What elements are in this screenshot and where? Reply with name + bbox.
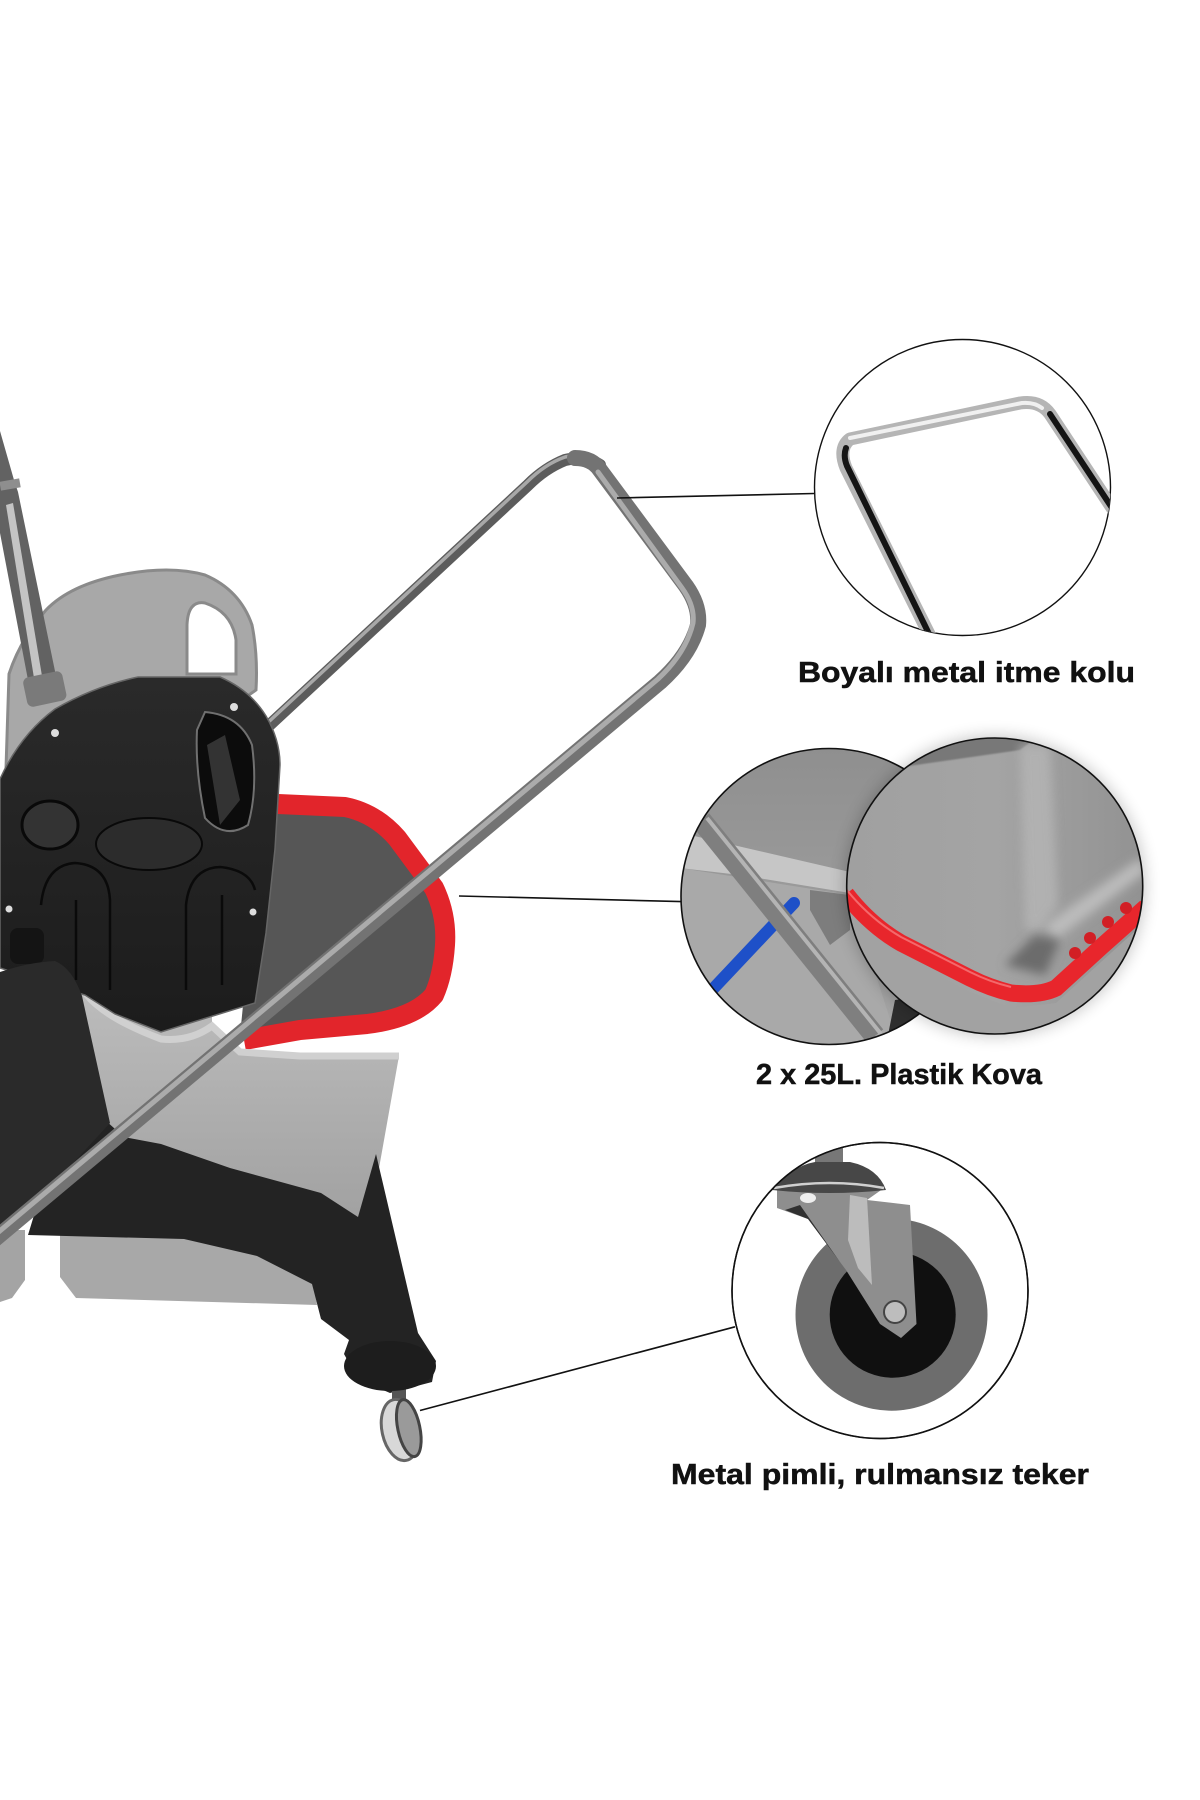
red bucket rim	[244, 804, 445, 1040]
leg foot cap	[344, 1341, 436, 1391]
metal bar highlight	[707, 818, 881, 1034]
tube legs dark core	[845, 414, 1120, 640]
dark corner	[888, 1000, 918, 1031]
back bucket	[5, 570, 256, 800]
wheel caption: Metal pimli, rulmansız teker	[671, 1459, 1089, 1491]
mop pole	[0, 431, 67, 708]
bracket bright fold	[848, 1195, 872, 1285]
blue bar	[712, 903, 794, 990]
cap dome	[772, 1162, 886, 1193]
thin upper handle bar	[262, 455, 600, 732]
caster fork	[392, 1385, 406, 1407]
axle bolt	[884, 1301, 906, 1323]
tube top highlight	[850, 403, 1042, 438]
red band highlight	[846, 889, 1011, 987]
leader line to handle detail	[617, 494, 814, 498]
pale bucket rim	[680, 835, 850, 893]
black base and leg	[28, 1120, 436, 1393]
second bucket lower part	[60, 1225, 317, 1305]
press plate small button	[22, 801, 78, 849]
mop slot	[197, 712, 254, 831]
detail circle: push handle	[814, 340, 1120, 640]
caster wheel	[376, 1396, 426, 1464]
cart illustration	[0, 431, 698, 1464]
shadow behind red rim circle	[845, 736, 1145, 1036]
left bucket stub	[0, 1230, 25, 1302]
main handle tube	[0, 458, 698, 1239]
metal bar	[701, 820, 875, 1036]
detail circle: bucket with mop bar	[680, 748, 920, 1046]
bucket interior	[240, 812, 438, 1036]
leader line to wheel detail	[420, 1327, 735, 1410]
screws	[6, 703, 256, 916]
small knob above block	[10, 928, 44, 964]
front black block	[0, 961, 110, 1235]
light streak above the rim	[1045, 858, 1146, 940]
rim underside	[810, 890, 850, 945]
slot mop fabric	[207, 735, 240, 825]
red rim band	[846, 894, 1146, 994]
upper dark wedge	[909, 738, 1030, 766]
hub	[830, 1252, 956, 1378]
bracket dark fold	[785, 1205, 840, 1262]
bracket highlight	[800, 1193, 816, 1203]
stem	[815, 1148, 843, 1162]
bucket caption: 2 x 25L. Plastik Kova	[756, 1059, 1043, 1091]
vertical lighter fold	[1020, 745, 1058, 930]
rim holes	[1069, 902, 1132, 959]
press plate ribs	[41, 863, 255, 990]
detail circle: caster wheel	[732, 1140, 1028, 1438]
lower bucket wall	[682, 869, 874, 980]
area below the rim	[1078, 932, 1134, 1006]
tube outer silhouette	[843, 402, 1120, 640]
black press plate	[0, 677, 280, 1032]
fold shadow above the rim	[1005, 935, 1060, 975]
tire	[796, 1219, 988, 1411]
infographic canvas	[0, 338, 1152, 1490]
bracket	[777, 1188, 916, 1338]
detail circle: red rim	[845, 720, 1146, 1040]
cap rim	[774, 1183, 884, 1188]
front bucket body	[72, 990, 399, 1230]
press plate large oval	[96, 818, 202, 870]
leader line to bucket detail	[459, 896, 681, 902]
handle caption: Boyalı metal itme kolu	[798, 657, 1135, 689]
